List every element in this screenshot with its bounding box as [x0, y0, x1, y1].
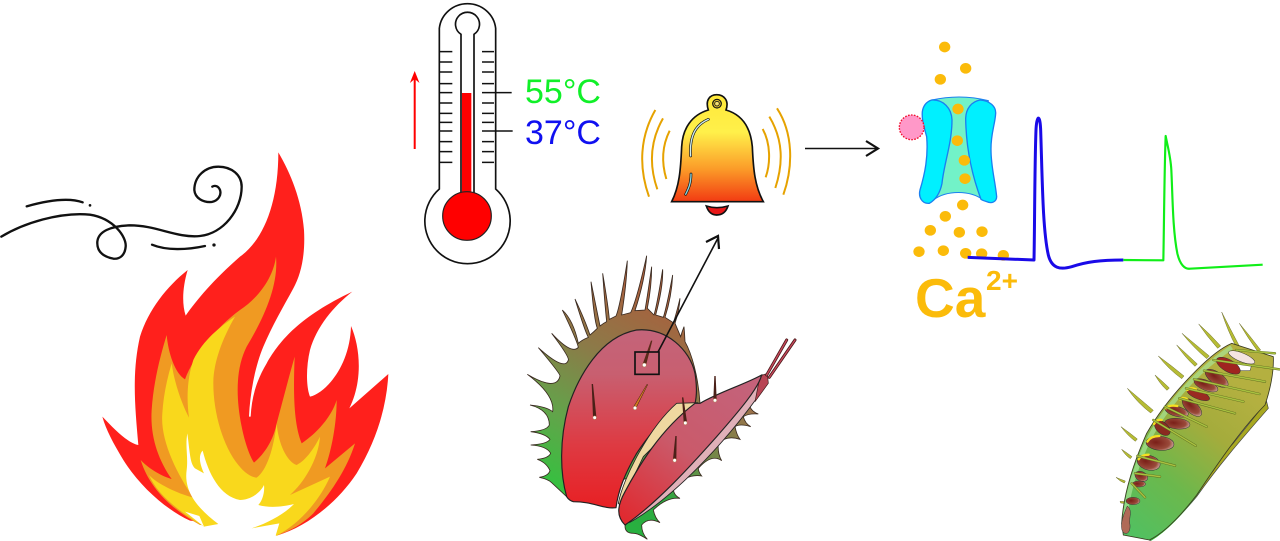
flytrap: front fringe	[625, 387, 763, 539]
flame: yellow layer	[149, 317, 330, 536]
trace: 37°C blue	[968, 118, 1123, 268]
arrow: temperature rise	[410, 71, 420, 149]
chart: action potential traces	[968, 118, 1263, 269]
label: 37°C: 37°C	[525, 114, 601, 152]
closed leaf: front spines	[1132, 350, 1279, 497]
label: Ca2+	[915, 265, 1018, 329]
flytrap: front lobe	[619, 375, 762, 525]
channel: ligand	[899, 115, 924, 140]
label: 55°C: 55°C	[525, 73, 601, 111]
bell: clapper	[706, 206, 728, 215]
icon: calcium channel	[899, 42, 1009, 261]
closed leaf: light edge	[1125, 347, 1232, 517]
bell: highlights	[686, 119, 708, 194]
icon: wind swirl	[1, 167, 242, 259]
label: Ca2+: 2+	[986, 265, 1018, 296]
flytrap: rear lobe	[562, 330, 697, 508]
flytrap: lower pale edge	[629, 378, 765, 523]
bell: vibration arcs	[642, 108, 790, 197]
icon: thermometer	[425, 4, 513, 264]
icon: ringing bell	[642, 95, 790, 215]
label: Ca2+: Ca	[915, 267, 986, 329]
icon: flame	[102, 152, 388, 540]
flytrap: magnifier square	[635, 352, 659, 374]
closed leaf: blade	[1122, 343, 1273, 540]
flame: orange layer	[141, 257, 355, 536]
flytrap: cream rim	[618, 403, 697, 505]
arrow: bell to channel	[805, 141, 878, 156]
closed leaf: yellow crescents	[1139, 388, 1196, 459]
icon: flytrap closed leaf	[1116, 312, 1279, 541]
flytrap: rear fringe	[527, 256, 700, 497]
calcium ions	[913, 42, 1009, 261]
closed leaf: under edge	[1147, 402, 1268, 541]
closed leaf: holes	[1121, 348, 1256, 534]
arrow: hair to bell	[658, 236, 719, 352]
channel: pore	[932, 97, 988, 200]
flytrap: trigger hairs	[592, 341, 717, 462]
icon: flytrap open leaf	[527, 256, 795, 539]
thermometer: tick marks	[440, 52, 513, 162]
thermometer: mercury	[462, 93, 471, 196]
trace: 55°C green	[1123, 136, 1263, 269]
flame: white core	[186, 433, 294, 540]
flytrap: tip spines	[755, 340, 795, 402]
channel: right subunit	[966, 100, 997, 203]
channel: left subunit	[920, 100, 952, 203]
closed leaf: back spines	[1116, 312, 1261, 504]
